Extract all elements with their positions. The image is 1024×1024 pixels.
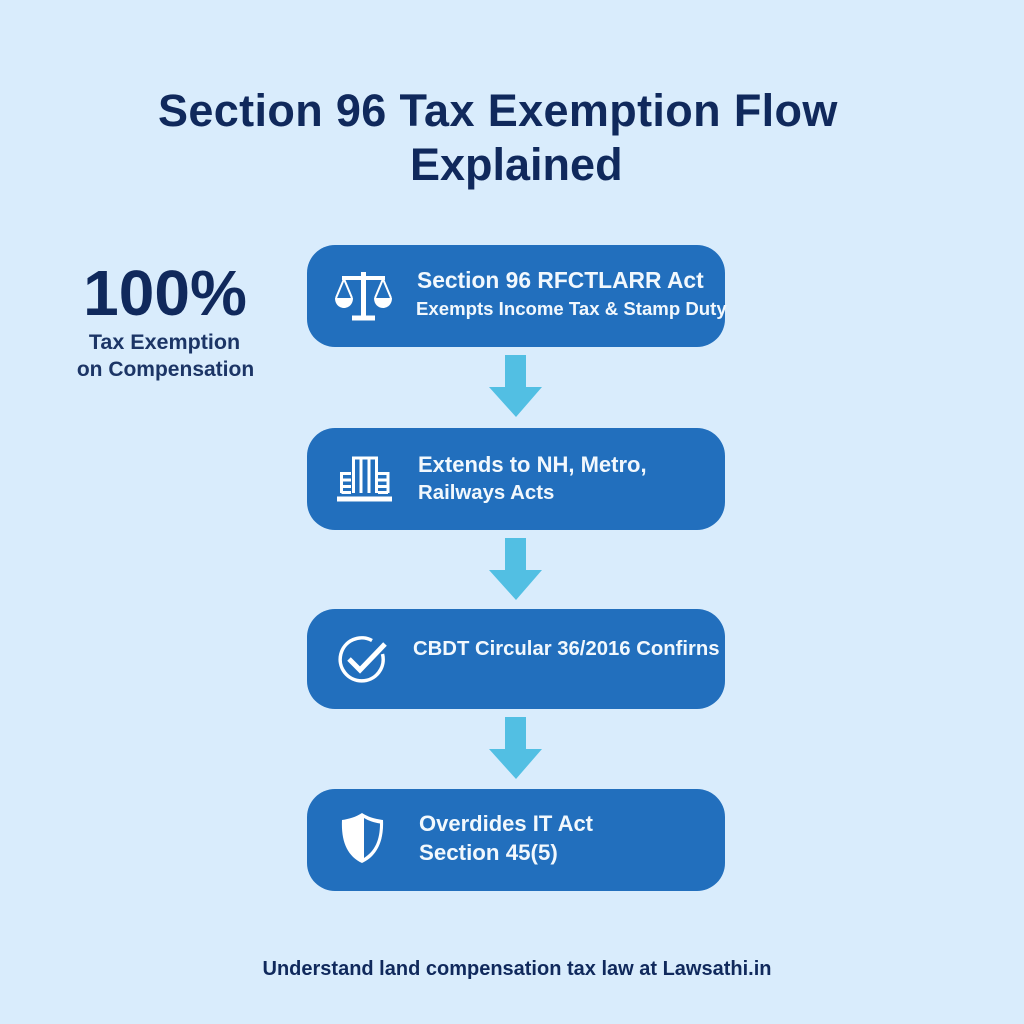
footer: Understand land compensation tax law at Lawsathi.in [262, 958, 771, 980]
title [158, 85, 838, 190]
icon: buildings [337, 456, 392, 502]
stat number: 100% [83, 257, 247, 329]
arrow 2 [489, 538, 542, 600]
arrow 1 [489, 355, 542, 417]
step 2 text: Railways Acts [418, 482, 554, 504]
icon: scales of justice [335, 272, 392, 320]
panel: step 2 [307, 428, 725, 530]
step 2 text: Extends to NH, Metro, [418, 452, 647, 477]
title: Explained [410, 139, 623, 190]
step 1 text: Section 96 RFCTLARR Act [417, 267, 704, 293]
icon: shield [342, 813, 384, 863]
step 2 text [418, 452, 647, 504]
step 4 text: Section 45(5) [419, 840, 558, 865]
step 3 text: CBDT Circular 36/2016 Confirns [413, 638, 720, 660]
panel: step 3 [307, 609, 725, 709]
arrow 3 [489, 717, 542, 779]
step 4 text: Overdides IT Act [419, 811, 593, 836]
step 1 text: Exempts Income Tax & Stamp Duty [416, 298, 727, 319]
panel: step 4 [307, 789, 725, 891]
panel: step 1 [307, 245, 725, 347]
title: Section 96 Tax Exemption Flow [158, 85, 838, 136]
step 4 text [419, 811, 593, 865]
stat caption [77, 330, 254, 381]
stat caption: on Compensation [77, 358, 254, 381]
icon: check circle [338, 636, 387, 683]
step 1 text [416, 267, 727, 319]
stat caption: Tax Exemption [89, 330, 240, 354]
stat callout: 100% tax exemption [77, 257, 254, 381]
